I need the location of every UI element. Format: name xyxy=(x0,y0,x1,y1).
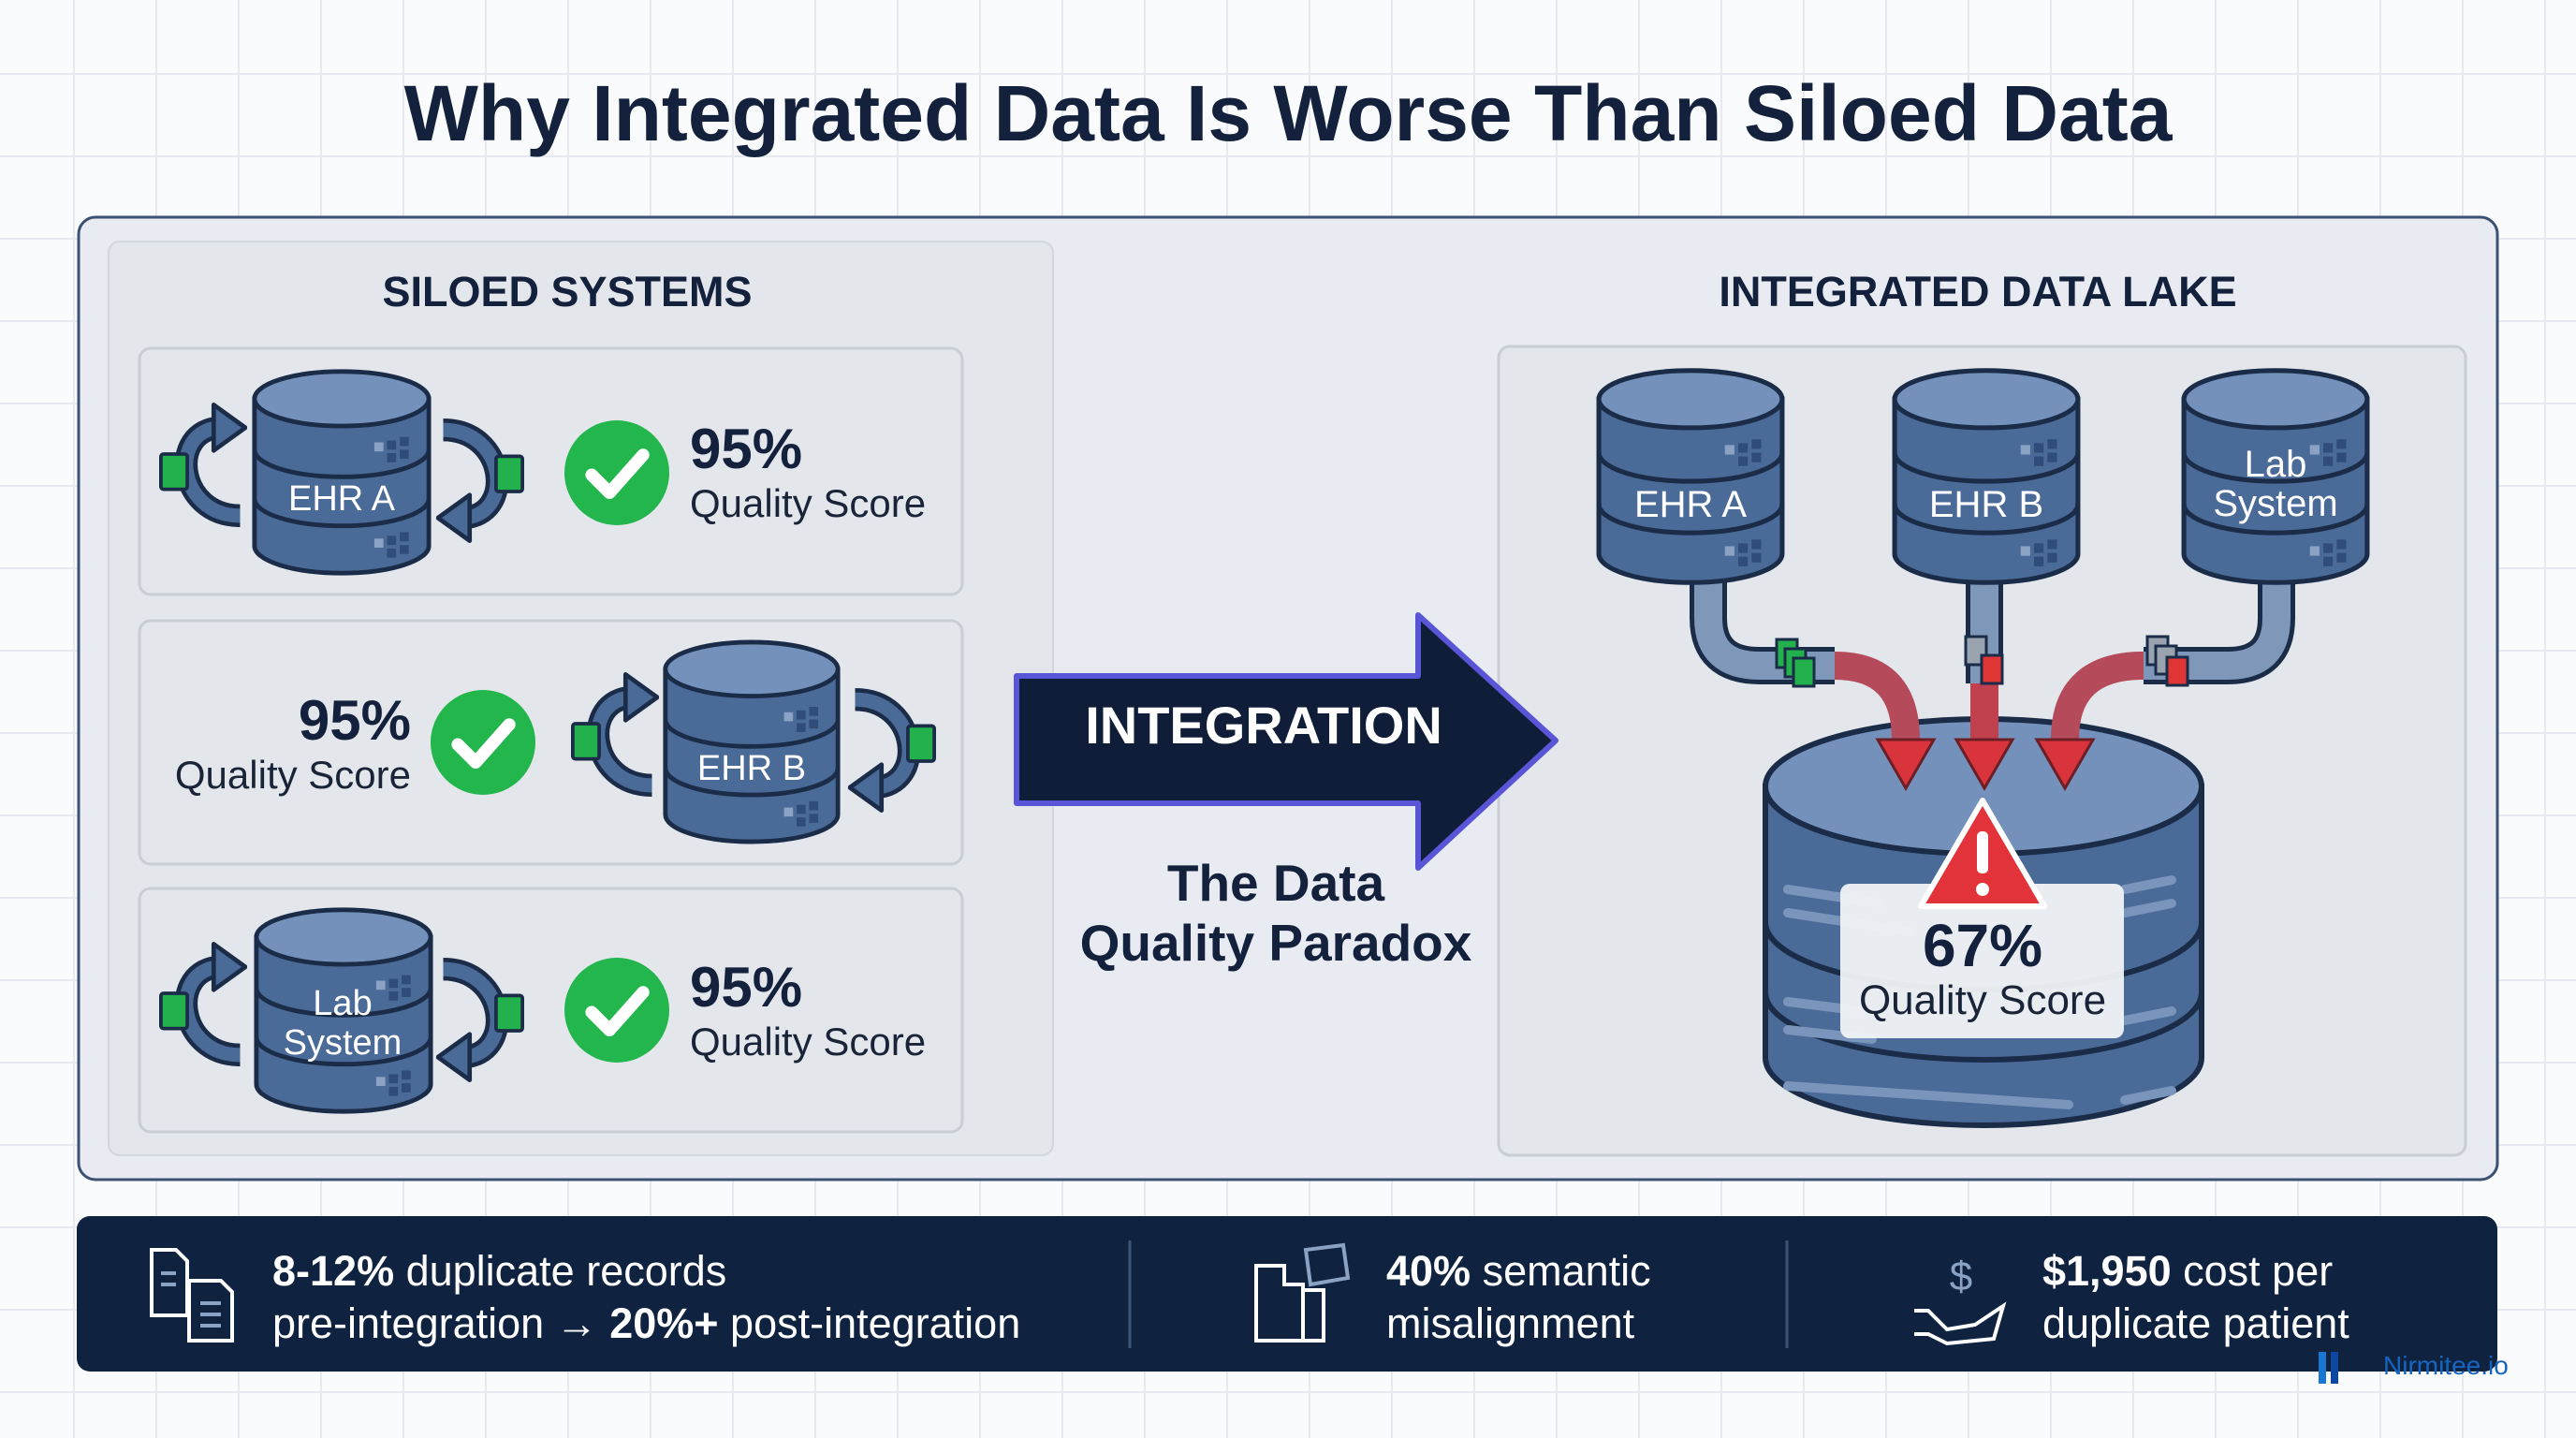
stat: semantic misalignment: 40% semantic xyxy=(1386,1247,1651,1295)
row: EHR A: 95% xyxy=(690,418,802,480)
callout: 67% quality score: Quality Score xyxy=(1859,977,2106,1023)
row: Lab System: Quality Score xyxy=(690,1020,926,1064)
text: the data quality paradox: The Data xyxy=(1167,854,1385,912)
bottom stats bar xyxy=(77,1216,2497,1372)
stat: duplicates: pre-integration → 20%+ post-integration xyxy=(272,1299,1020,1347)
row: EHR B: Quality Score xyxy=(175,753,411,797)
title: Why Integrated Data Is Worse Than Siloed Data xyxy=(404,69,2174,157)
row: Lab System: System xyxy=(284,1023,402,1063)
row: EHR A: EHR A xyxy=(288,479,396,519)
icon: hand with dollar xyxy=(1914,1254,2003,1343)
cylinders: sources: EHR B xyxy=(1929,484,2043,525)
panel: integrated data lake xyxy=(1499,268,2466,1155)
row: EHR B: EHR B xyxy=(697,749,806,788)
panel: siloed systems xyxy=(109,242,1053,1155)
pipes xyxy=(1708,580,2276,683)
text: the data quality paradox: Quality Paradox xyxy=(1080,914,1472,972)
callout: 67% quality score xyxy=(1840,884,2124,1038)
row: Lab System xyxy=(139,888,962,1132)
row: Lab System: 95% xyxy=(690,956,802,1019)
icon: hand with dollar: $ xyxy=(1950,1254,1972,1299)
arrow: integration xyxy=(1017,615,1556,868)
callout: 67% quality score: 67% xyxy=(1923,912,2042,979)
stat: semantic misalignment: misalignment xyxy=(1386,1299,1635,1347)
stat: cost: duplicate patient xyxy=(2042,1299,2349,1347)
logo: Nirmitee.io xyxy=(2319,1351,2509,1384)
row: EHR B xyxy=(139,621,962,864)
icon: warning xyxy=(1921,800,2044,906)
icon: documents on pipes xyxy=(1777,637,2188,686)
row: Lab System: Lab xyxy=(313,984,373,1023)
heading: integrated data lake: INTEGRATED DATA LAKE xyxy=(1719,268,2237,315)
icon: documents xyxy=(152,1250,232,1341)
heading: siloed systems: SILOED SYSTEMS xyxy=(382,268,753,315)
big cylinder: data lake xyxy=(1765,719,2202,1125)
cylinders: sources: Lab xyxy=(2245,444,2306,485)
cylinders: sources: EHR A xyxy=(1634,484,1747,525)
cylinders: sources xyxy=(1599,371,2367,582)
icon: puzzle xyxy=(1256,1245,1348,1341)
logo: Nirmitee.io: Nirmitee.io xyxy=(2383,1351,2509,1380)
row: EHR B: 95% xyxy=(299,689,411,752)
main panel xyxy=(79,217,2497,1180)
cylinders: sources: System xyxy=(2213,483,2338,524)
red flow arrows xyxy=(1835,666,2144,788)
stat: duplicates: 8-12% duplicate records xyxy=(272,1247,726,1295)
stat: cost: $1,950 cost per xyxy=(2042,1247,2333,1295)
arrow: integration: INTEGRATION xyxy=(1085,696,1442,755)
row: EHR A: Quality Score xyxy=(690,481,926,525)
row: EHR A xyxy=(139,348,962,594)
